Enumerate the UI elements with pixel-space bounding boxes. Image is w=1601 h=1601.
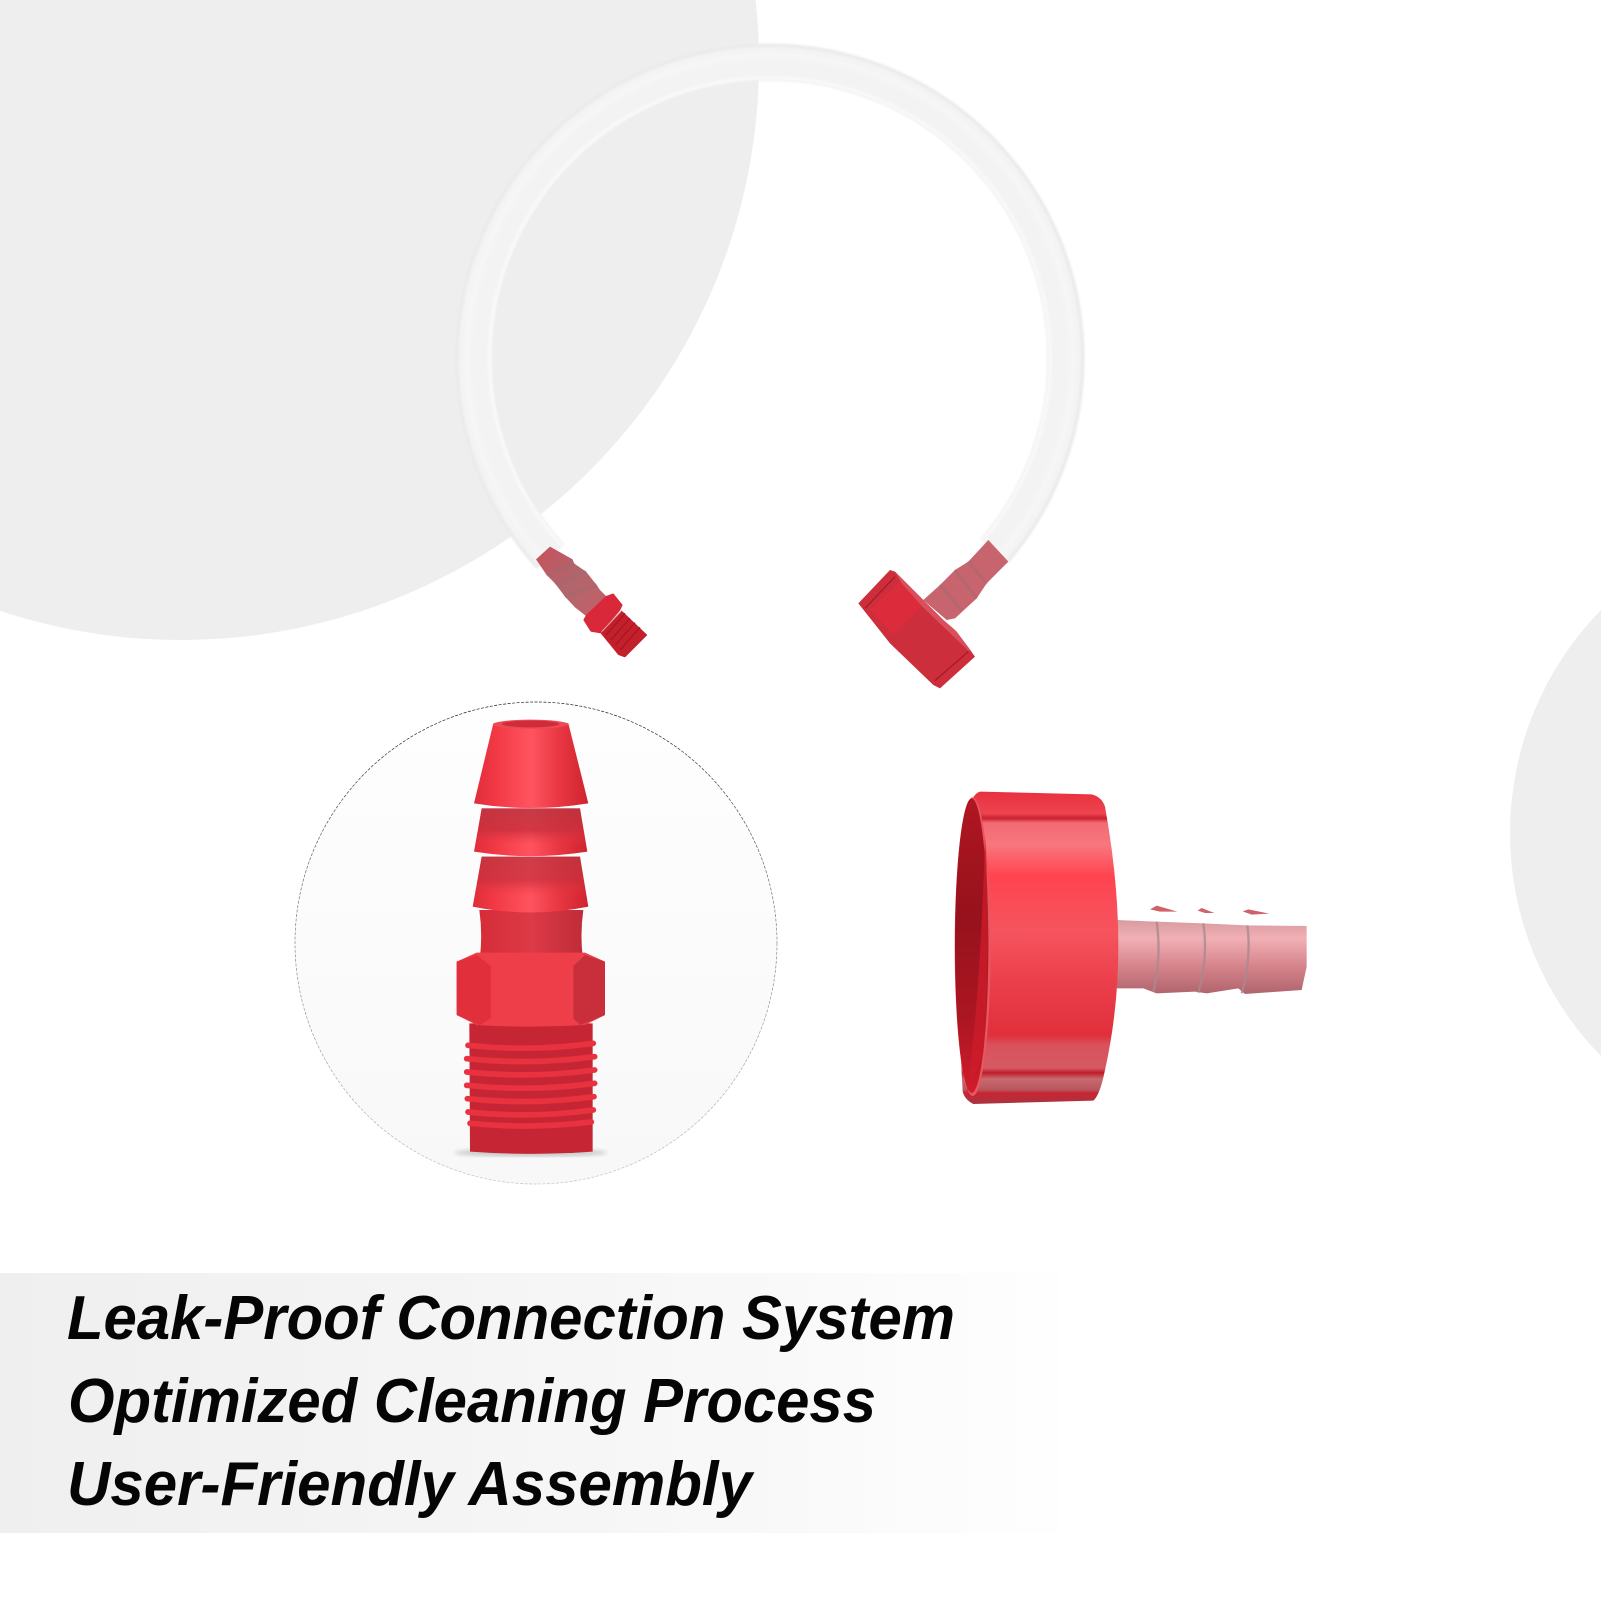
hex nut [457, 953, 605, 1027]
stem ridges [940, 562, 987, 610]
disc bright panel [870, 582, 922, 635]
feature: cleaning: Optimized Cleaning Process [68, 1367, 876, 1436]
cap inner opening [955, 798, 988, 1093]
neck [479, 910, 583, 957]
background circle: top left [0, 0, 759, 640]
barbed hub [1117, 920, 1307, 994]
magnified detail circle: barbed threaded fitting [295, 702, 777, 1184]
barbed stem [536, 547, 607, 616]
hub highlights [1150, 906, 1269, 915]
barbed stem [923, 540, 1008, 620]
large cap with barbed hub [955, 792, 1307, 1104]
small threaded fitting in tube end [536, 547, 647, 657]
background circle: right edge [1510, 514, 1601, 1152]
cap body [955, 792, 1118, 1104]
thread ribs [467, 1043, 595, 1126]
threaded end [601, 611, 647, 657]
third barb [473, 857, 588, 912]
fitting shadow [454, 1149, 607, 1157]
cap rim [955, 797, 991, 1096]
collar highlight [602, 612, 621, 632]
feature: leak-proof: Leak-Proof Connection System [67, 1284, 955, 1353]
disc pink side [895, 572, 972, 652]
hex collar [583, 593, 623, 633]
thread base [469, 1023, 593, 1154]
top rim [493, 720, 568, 729]
feature list [67, 1284, 955, 1519]
clear tube [467, 55, 1073, 561]
top opening [502, 721, 559, 727]
text backing band [0, 1273, 1060, 1533]
inner wall reflection [967, 837, 988, 1093]
hub ridges [1153, 922, 1249, 993]
stem ridges [547, 563, 597, 597]
disc grooves [865, 577, 968, 681]
feature: assembly: User-Friendly Assembly [67, 1450, 755, 1519]
top barb [474, 720, 588, 808]
second barb [474, 808, 587, 856]
disc [858, 570, 975, 688]
cap fitting in tube end [858, 540, 1008, 688]
